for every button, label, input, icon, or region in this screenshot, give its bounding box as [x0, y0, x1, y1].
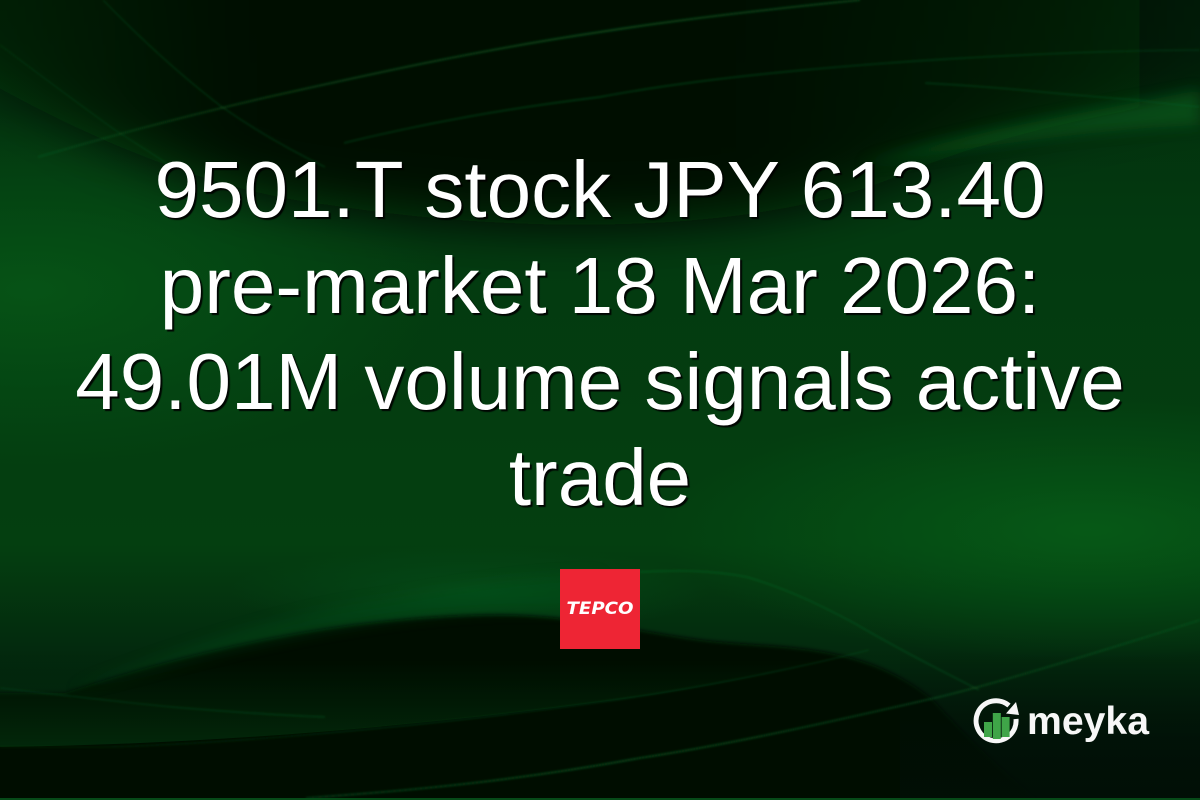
logo: meyka: [974, 698, 1150, 744]
title: trade: [509, 433, 691, 522]
icon: circular arrow with bars: [976, 701, 1019, 741]
bright green band top right: [860, 90, 1200, 165]
title: pre-market 18 Mar 2026:: [160, 241, 1040, 330]
logo: TEPCO: [560, 569, 640, 649]
wordmark: meyka: [1027, 700, 1149, 743]
title: 9501.T stock JPY 613.40: [154, 145, 1045, 234]
dark top sweep: [0, 0, 1200, 225]
lighter wave above the dome: [69, 575, 600, 690]
dark lower dome: [0, 615, 1050, 800]
lighter slab between dome and lower arc: [0, 650, 900, 747]
bottom edge line: [0, 798, 1200, 800]
logo: TEPCO: TEPCO: [566, 599, 634, 619]
lower right fade: [900, 650, 1200, 800]
title: [75, 145, 1125, 522]
title: 49.01M volume signals active: [75, 337, 1125, 426]
